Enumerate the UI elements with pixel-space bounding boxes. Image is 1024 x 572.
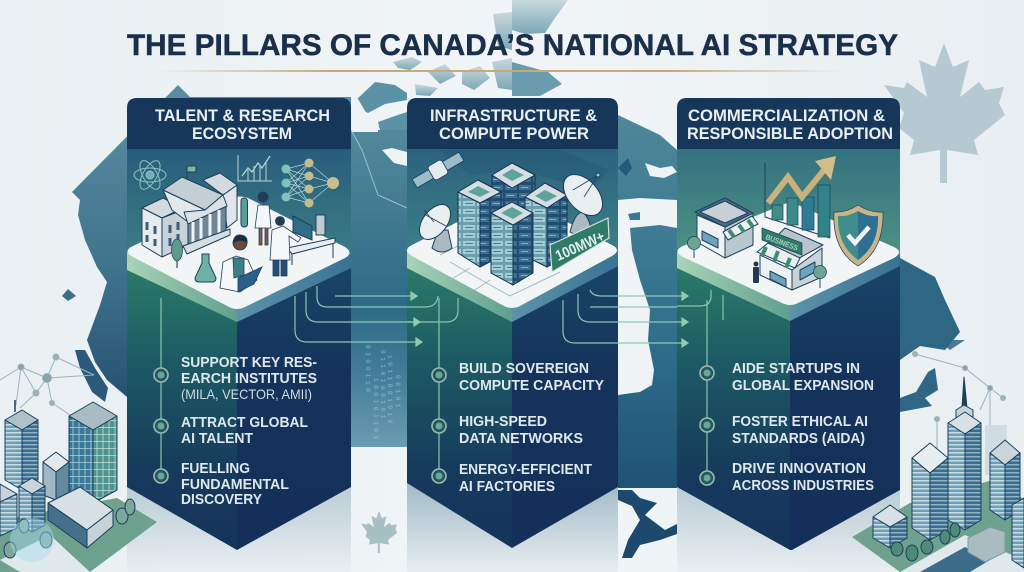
icon: person <box>753 262 759 283</box>
lower left panel section <box>407 260 512 548</box>
lower right panel section <box>237 260 351 550</box>
text: bullet three <box>732 461 874 494</box>
panel: talent and research <box>127 98 351 550</box>
icon: conical flask <box>195 254 216 282</box>
text: bullet one <box>181 355 317 402</box>
faded center building <box>968 527 1005 562</box>
text: bullet three: AI FACTORIES <box>459 479 555 495</box>
arrows: pillar two to pillar three <box>618 292 688 347</box>
lower left panel section <box>677 260 790 550</box>
binary data stream: 0 1 0 0 1 1 0 <box>364 345 371 392</box>
text: bullet one: AIDE STARTUPS IN <box>732 361 860 377</box>
panel body <box>127 149 351 320</box>
text: bullet two: HIGH-SPEED <box>459 414 547 430</box>
low wide building <box>48 487 113 548</box>
far-right block <box>1012 498 1024 568</box>
lower left panel section <box>127 260 237 550</box>
icon: scientist with clipboard <box>220 235 262 292</box>
panel: infrastructure and compute <box>407 98 618 548</box>
flow lines <box>407 290 618 476</box>
icon: atom <box>134 158 166 192</box>
text: bullet two: ATTRACT GLOBAL <box>181 415 308 431</box>
text: bullet three <box>181 461 289 508</box>
striped left tower <box>912 443 948 540</box>
trees <box>4 499 135 558</box>
bullet timeline <box>700 366 714 485</box>
server rack: right <box>525 183 567 267</box>
isometric platform <box>677 203 900 321</box>
text: bullet one: GLOBAL EXPANSION <box>732 378 874 394</box>
heading <box>430 107 597 143</box>
map: western Canada <box>72 85 407 447</box>
icon: left satellite dish <box>413 199 457 252</box>
icon: bar chart <box>765 163 830 238</box>
icon: shield <box>834 205 883 266</box>
text: bullet two <box>732 414 868 447</box>
title underline <box>155 70 845 72</box>
panel header <box>677 98 900 149</box>
heading: ECOSYSTEM <box>192 125 292 143</box>
ground <box>852 478 1024 572</box>
text: bullet one: EARCH INSTITUTES <box>181 371 317 387</box>
badge: 100MW+: 100MW+ <box>553 228 608 265</box>
icon: line chart <box>238 155 272 181</box>
ground <box>0 498 157 572</box>
map: eastern Canada and Hudson Bay <box>618 115 677 488</box>
panel body <box>677 149 900 320</box>
icon: standing scientist <box>255 192 271 245</box>
text: bullet two <box>459 414 583 447</box>
spire tower <box>948 377 981 530</box>
lower right panel section <box>790 260 900 550</box>
binary data stream: 0 1 1 0 1 0 0 1 0 1 <box>379 350 386 419</box>
icon: growth arrow <box>768 156 836 203</box>
map: Great Lakes region <box>618 490 677 558</box>
title: THE PILLARS OF CANADA’S NATIONAL AI STRATEGY <box>127 29 898 62</box>
text: bullet three: FUELLING <box>181 461 250 477</box>
trees <box>891 523 960 561</box>
text: bullet three: ENERGY-EFFICIENT <box>459 462 592 478</box>
tinted zones beneath pillars <box>127 478 900 572</box>
icon: scientist at desk <box>270 216 301 276</box>
icon: test tube <box>241 198 248 227</box>
icon: small maple leaf <box>361 511 397 553</box>
lower right panel section <box>512 260 618 548</box>
panel header <box>407 98 618 149</box>
icon: university building <box>142 166 237 257</box>
flow lines <box>677 290 723 478</box>
sign: business: BUSINESS <box>764 232 799 253</box>
faint map inside panel <box>440 150 610 190</box>
mid tower <box>43 452 69 500</box>
text: bullet one: BUILD SOVEREIGN <box>459 361 589 377</box>
map: arctic islands <box>393 0 568 96</box>
short striped block <box>19 478 45 532</box>
text: bullet three: FUNDAMENTAL <box>181 477 289 493</box>
network lines and nodes <box>0 354 94 420</box>
text: bullet one: COMPUTE CAPACITY <box>459 378 604 394</box>
arrows: pillar one to pillar two <box>335 292 422 346</box>
icon: lab desk and monitor <box>287 215 335 265</box>
panel: commercialization and adoption <box>677 98 900 550</box>
text: bullet two: STANDARDS (AIDA) <box>732 431 865 447</box>
icon: large maple leaf <box>884 43 1005 183</box>
map: central strip between pillars one and two <box>351 82 407 447</box>
text: bullet one: (MILA, VECTOR, AMII) <box>181 386 312 402</box>
heading: COMMERCIALIZATION & <box>688 107 885 125</box>
binary data stream: 0 0 1 0 1 <box>394 375 401 408</box>
server racks <box>458 163 567 285</box>
icon: second storefront <box>757 228 823 290</box>
flow lines <box>161 286 351 476</box>
network lines and nodes <box>912 352 1006 450</box>
text: bullet two: DATA NETWORKS <box>459 431 583 447</box>
panel body <box>407 149 618 320</box>
binary data stream: 1 0 0 1 0 1 1 0 1 <box>372 378 379 440</box>
text: bullet one <box>459 361 604 394</box>
icon: right satellite dish <box>556 167 610 235</box>
text: bullet three: ACROSS INDUSTRIES <box>732 478 874 494</box>
binary data stream: 1 0 1 1 0 0 1 0 1 0 <box>386 355 393 424</box>
right city illustration <box>852 352 1024 572</box>
left city illustration <box>0 354 157 572</box>
badge: 100MW+ <box>550 218 609 272</box>
heading: COMPUTE POWER <box>439 125 589 143</box>
background tower ghost <box>985 425 1007 475</box>
icon: first storefront <box>695 198 758 258</box>
heading: TALENT & RESEARCH <box>155 107 330 125</box>
text: bullet three <box>459 462 592 495</box>
icon: satellite <box>411 150 465 190</box>
heading <box>155 107 330 143</box>
icon: neural network <box>282 158 339 208</box>
map: small coastal islands <box>62 289 108 402</box>
bullet timeline <box>432 368 446 483</box>
isometric platform <box>127 196 351 322</box>
text: bullet two <box>181 415 308 447</box>
text: bullet three: DISCOVERY <box>181 492 262 508</box>
left edge block <box>0 484 17 536</box>
icon: tree by second store <box>814 266 826 288</box>
glass tower <box>69 402 117 503</box>
isometric platform <box>407 196 618 322</box>
text: bullet three: DRIVE INNOVATION <box>732 461 866 477</box>
heading <box>687 107 893 143</box>
server rack: front <box>491 202 533 285</box>
panel header <box>127 98 351 149</box>
text: bullet one: SUPPORT KEY RES- <box>181 355 317 371</box>
text: bullet one <box>732 361 874 394</box>
bullet timeline <box>154 368 168 483</box>
icon: tree by first store <box>688 236 700 258</box>
server rack: back <box>492 163 535 225</box>
heading: INFRASTRUCTURE & <box>430 107 597 125</box>
tall striped tower <box>5 400 38 490</box>
small block <box>873 505 907 548</box>
striped right tower <box>990 440 1020 520</box>
server rack: left <box>458 180 501 267</box>
heading: RESPONSIBLE ADOPTION <box>687 125 893 143</box>
text: bullet two: FOSTER ETHICAL AI <box>732 414 868 430</box>
map: Atlantic provinces <box>900 258 965 412</box>
translucent logo mark <box>10 518 54 562</box>
icon: tree <box>172 239 182 268</box>
text: bullet two: AI TALENT <box>181 431 253 447</box>
binary data stream <box>364 345 401 440</box>
